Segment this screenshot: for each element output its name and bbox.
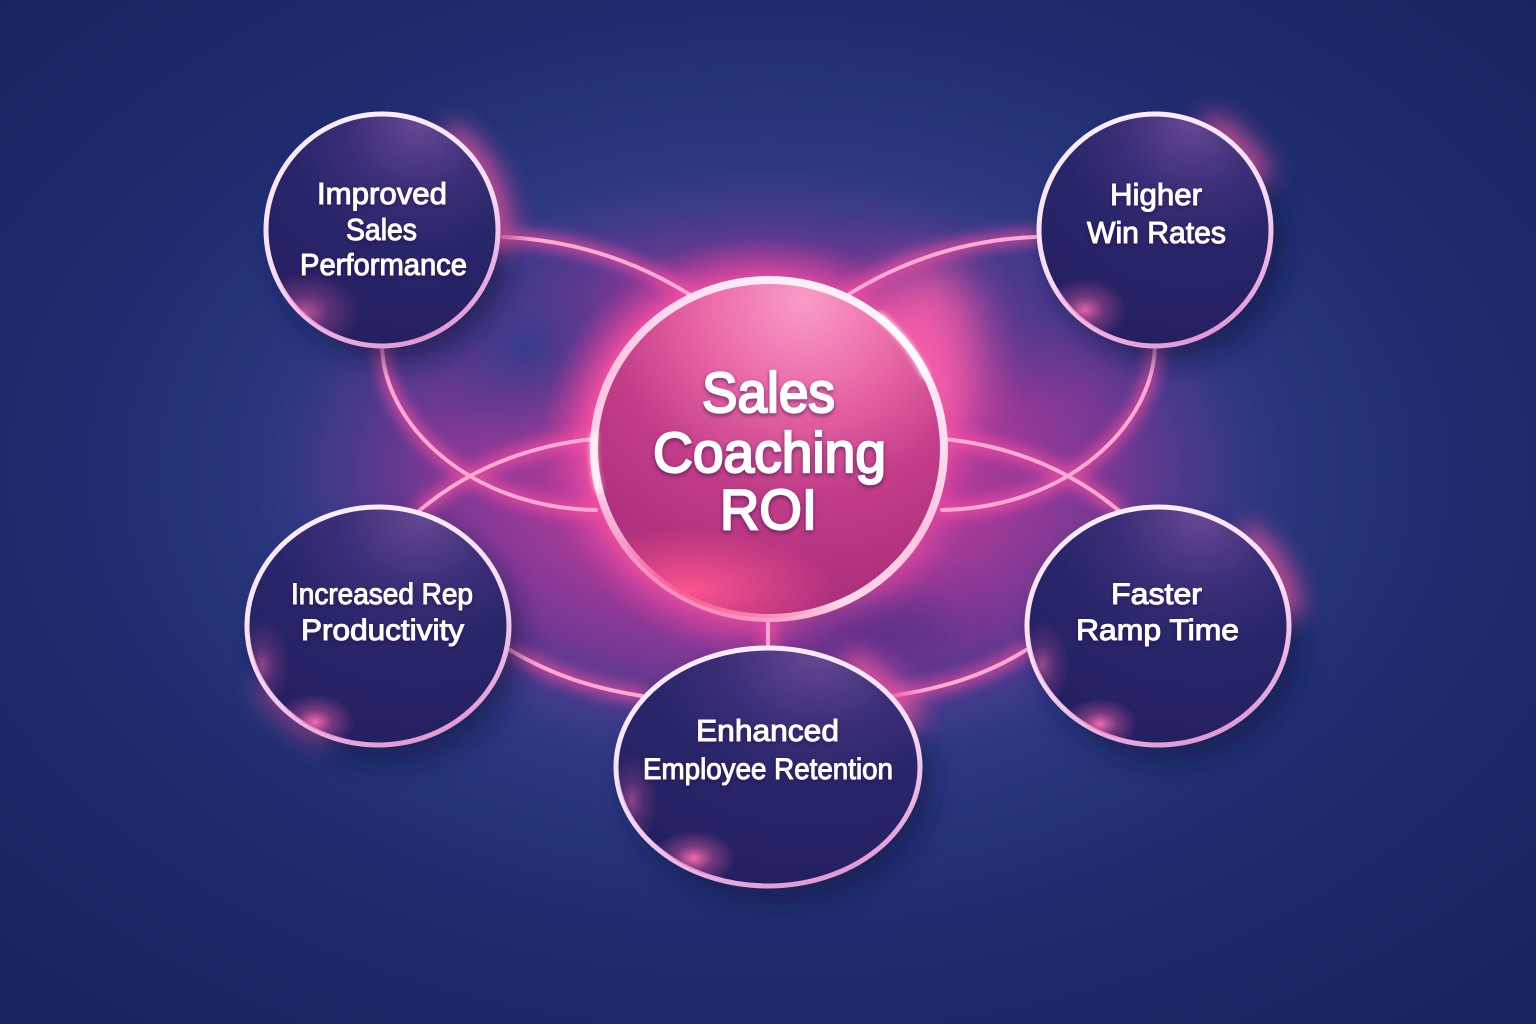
- node: Faster Ramp Time: [1014, 507, 1301, 762]
- label: Productivity: [301, 614, 464, 647]
- central node: Sales Coaching ROI: [586, 276, 948, 622]
- label: Improved: [317, 176, 447, 211]
- title: Coaching: [653, 421, 886, 485]
- label: Higher: [1110, 177, 1202, 212]
- label: Performance: [300, 247, 467, 282]
- label: Win Rates: [1087, 215, 1226, 250]
- title: Sales: [702, 361, 835, 425]
- connector lines: [382, 237, 1155, 696]
- title: ROI: [720, 478, 817, 542]
- node: Increased Rep Productivity: [234, 507, 521, 762]
- node: Higher Win Rates: [1039, 114, 1283, 362]
- label: Increased Rep: [291, 578, 473, 611]
- central glow: [254, 165, 1284, 775]
- title: [653, 361, 886, 542]
- label: [1076, 578, 1239, 647]
- node: Enhanced Employee Retention: [606, 648, 932, 903]
- label: [1087, 177, 1226, 250]
- label: Employee Retention: [643, 753, 893, 786]
- label: Faster: [1111, 578, 1202, 611]
- label: Ramp Time: [1076, 614, 1239, 647]
- label: Enhanced: [696, 713, 839, 748]
- label: [300, 176, 467, 282]
- label: Sales: [346, 212, 417, 247]
- node: Improved Sales Performance: [250, 114, 510, 362]
- label: [291, 578, 473, 647]
- label: [643, 713, 893, 786]
